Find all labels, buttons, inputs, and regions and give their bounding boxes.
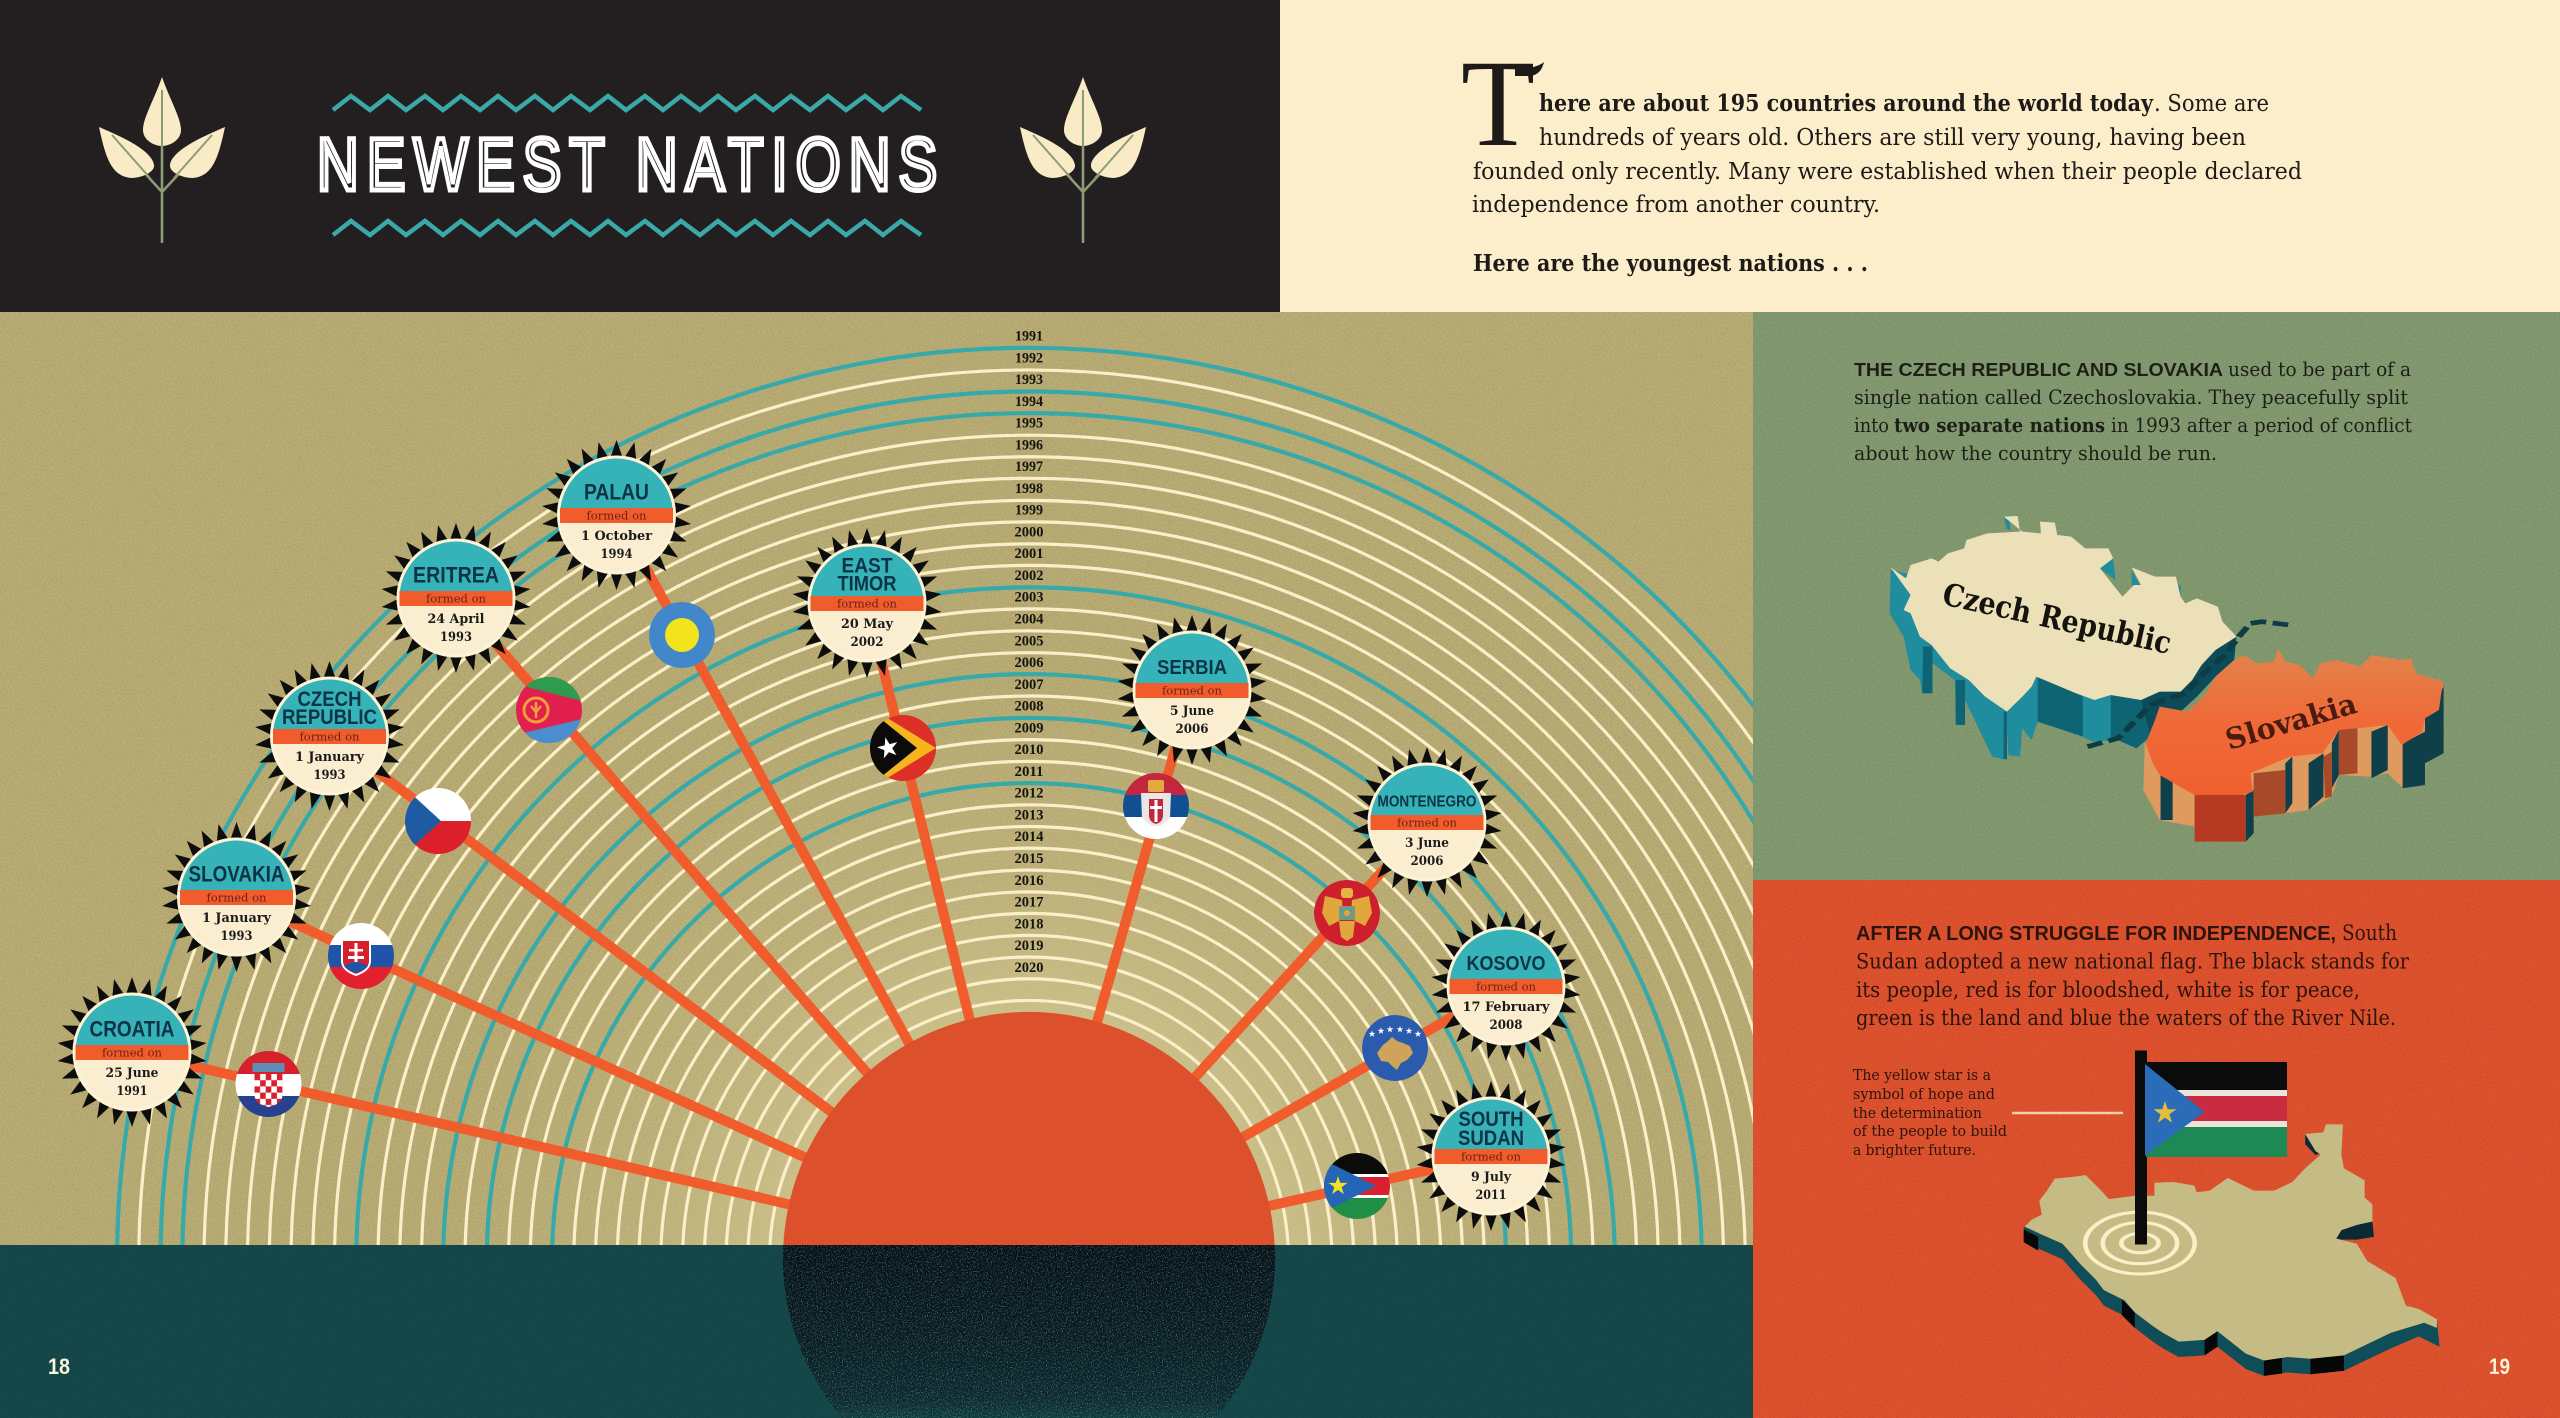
year labels: 2008 bbox=[1014, 699, 1044, 715]
year labels: 1992 bbox=[1015, 350, 1043, 366]
Slovakia extruded side bbox=[2143, 687, 2444, 842]
year labels: 1998 bbox=[1015, 481, 1043, 497]
badge: South Sudan: 9 July bbox=[1471, 1170, 1511, 1185]
badge: Serbia: 5 June bbox=[1170, 704, 1214, 719]
year labels: 2007 bbox=[1014, 677, 1044, 693]
badge: East Timor: 2002 bbox=[850, 635, 884, 650]
flag: Palau bbox=[649, 602, 715, 668]
badge: Palau: 1994 bbox=[600, 547, 632, 562]
drop cap T: T bbox=[1461, 35, 1535, 172]
badge: Czech Republic: 1 January bbox=[295, 750, 364, 765]
badge: Czech Republic: CZECH bbox=[298, 688, 362, 711]
badge: Montenegro: 3 June bbox=[1405, 836, 1449, 851]
badge: Slovakia: formed on bbox=[206, 890, 267, 904]
year labels: 2019 bbox=[1014, 938, 1044, 954]
panel text: in 1993 after a period of conflict bbox=[2111, 413, 2412, 437]
callout text: yellow star: a brighter future. bbox=[1853, 1143, 1976, 1159]
panel: South Sudan bbox=[1853, 921, 2440, 1376]
badge: Eritrea bbox=[381, 523, 531, 673]
label: Czech Republic: Czech Republic bbox=[1939, 577, 2175, 662]
badge: South Sudan: formed on bbox=[1461, 1150, 1522, 1164]
badge: South Sudan: SUDAN bbox=[1458, 1127, 1524, 1150]
badge: Serbia bbox=[1117, 615, 1267, 765]
map: Czech Republic and Slovakia bbox=[1890, 516, 2444, 842]
badge: Palau: 1 October bbox=[581, 529, 652, 544]
intro paragraph: here are about 195 countries around the world today bbox=[1539, 90, 2154, 117]
badge: Kosovo: KOSOVO bbox=[1466, 953, 1546, 975]
panel text: into bbox=[1854, 413, 1889, 437]
panel text bbox=[1856, 921, 2410, 1030]
panel text: about how the country should be run. bbox=[1854, 441, 2217, 465]
panel text bbox=[1854, 357, 2412, 465]
intro paragraph: . Some are bbox=[2154, 91, 2269, 117]
Slovakia top surface bbox=[2146, 648, 2444, 795]
badge: East Timor bbox=[792, 528, 942, 678]
year labels: 1994 bbox=[1015, 394, 1043, 410]
intro paragraph: hundreds of years old. Others are still very young, having been bbox=[1539, 125, 2246, 151]
badge: Slovakia: 1993 bbox=[220, 929, 252, 944]
target rings bbox=[2085, 1212, 2195, 1274]
panel text: THE CZECH REPUBLIC AND SLOVAKIA bbox=[1854, 359, 2223, 380]
badge: Slovakia: SLOVAKIA bbox=[188, 862, 285, 886]
year labels: 2011 bbox=[1014, 764, 1044, 780]
chart: radial timeline bbox=[58, 331, 1753, 1418]
light glow around the sun bbox=[0, 312, 1753, 1245]
top zigzag rule bbox=[333, 96, 921, 110]
badge: South Sudan bbox=[1416, 1081, 1566, 1231]
intro paragraph bbox=[1472, 90, 2302, 218]
badge: South Sudan: 2011 bbox=[1476, 1188, 1506, 1203]
badge: Montenegro: 2006 bbox=[1410, 854, 1444, 869]
flag: Czech Republic bbox=[405, 788, 471, 854]
year labels: 2003 bbox=[1014, 590, 1044, 606]
flag: Slovakia bbox=[328, 923, 394, 989]
badge: Slovakia: 1 January bbox=[202, 911, 271, 926]
page number 18: 18 bbox=[48, 1354, 70, 1379]
year labels: 2013 bbox=[1014, 807, 1044, 823]
bottom zigzag rule bbox=[333, 221, 921, 235]
flag: East Timor bbox=[870, 714, 936, 782]
label: Slovakia: Slovakia bbox=[2221, 686, 2361, 757]
badge: East Timor: formed on bbox=[837, 596, 898, 610]
lead-in line: Here are the youngest nations . . . bbox=[1473, 250, 1868, 277]
year labels: 2001 bbox=[1014, 546, 1044, 562]
title: NEWEST NATIONS bbox=[317, 124, 937, 207]
sun below the horizon bbox=[783, 1245, 1275, 1418]
year labels: 2020 bbox=[1014, 960, 1044, 976]
flag: Serbia bbox=[1123, 773, 1189, 839]
icon: right leaf sprig bbox=[1020, 77, 1146, 243]
year labels: 2000 bbox=[1014, 524, 1044, 540]
badge: Palau: PALAU bbox=[584, 480, 649, 504]
badge: Czech Republic: 1993 bbox=[314, 768, 346, 783]
icon: left leaf sprig bbox=[99, 77, 225, 243]
badge: East Timor: EAST bbox=[842, 554, 893, 578]
panel: intro text bbox=[1280, 0, 2560, 312]
year labels: 2014 bbox=[1014, 829, 1044, 845]
badge: South Sudan: SOUTH bbox=[1458, 1108, 1524, 1131]
year labels bbox=[1014, 328, 1044, 976]
callout text: yellow star bbox=[1853, 1068, 2007, 1159]
flag: Montenegro bbox=[1314, 880, 1380, 946]
badge: Serbia: 2006 bbox=[1176, 722, 1208, 737]
panel text: green is the land and blue the waters of the River Nile. bbox=[1856, 1006, 2396, 1030]
badge: Montenegro: MONTENEGRO bbox=[1378, 794, 1476, 810]
year labels: 2016 bbox=[1014, 873, 1044, 889]
panel text: South bbox=[2342, 921, 2397, 945]
year labels: 2012 bbox=[1014, 786, 1044, 802]
panel text: AFTER A LONG STRUGGLE FOR INDEPENDENCE, bbox=[1856, 923, 2336, 945]
header panel: title bbox=[0, 0, 1280, 312]
panel text: used to be part of a bbox=[2228, 357, 2411, 381]
year labels: 2002 bbox=[1014, 568, 1044, 584]
South Sudan flag on pole bbox=[2135, 1050, 2287, 1244]
year labels: 1997 bbox=[1015, 459, 1043, 475]
map: South Sudan bbox=[2024, 1124, 2440, 1376]
badge: Palau bbox=[541, 440, 692, 590]
badge: Eritrea: formed on bbox=[426, 592, 487, 606]
badge: East Timor: 20 May bbox=[841, 617, 893, 632]
badge: Czech Republic bbox=[254, 661, 405, 811]
year labels: 2010 bbox=[1014, 742, 1044, 758]
panel: Czech Republic and Slovakia bbox=[1854, 357, 2444, 842]
badge: Croatia: formed on bbox=[102, 1046, 163, 1060]
badge: Montenegro: formed on bbox=[1397, 816, 1458, 830]
badge: Czech Republic: formed on bbox=[300, 730, 360, 744]
intro paragraph: founded only recently. Many were established when their people declared bbox=[1473, 159, 2302, 185]
badge: Eritrea: 1993 bbox=[440, 630, 472, 645]
year labels: 1996 bbox=[1015, 437, 1043, 453]
year labels: 2018 bbox=[1014, 916, 1044, 932]
callout text: yellow star: the determination bbox=[1853, 1106, 1982, 1122]
panel text: single nation called Czechoslovakia. They peacefully split bbox=[1854, 385, 2408, 409]
badge: Croatia: 25 June bbox=[106, 1066, 158, 1081]
callout text: yellow star: The yellow star is a bbox=[1853, 1068, 1991, 1084]
badge: Montenegro bbox=[1352, 747, 1502, 897]
year labels: 2009 bbox=[1014, 720, 1044, 736]
badge: Eritrea: 24 April bbox=[428, 612, 485, 627]
badge: Eritrea: ERITREA bbox=[413, 562, 499, 588]
badge: Croatia: 1991 bbox=[116, 1084, 148, 1099]
badge: Kosovo bbox=[1431, 911, 1581, 1061]
flag: South Sudan bbox=[1324, 1153, 1390, 1219]
badge: Kosovo: formed on bbox=[1476, 980, 1537, 994]
flag: Croatia bbox=[236, 1051, 302, 1117]
year labels: 1999 bbox=[1015, 503, 1043, 519]
badge: Serbia: SERBIA bbox=[1157, 657, 1227, 679]
badge: Croatia bbox=[57, 977, 207, 1127]
year labels: 2017 bbox=[1014, 894, 1044, 910]
callout text: yellow star: symbol of hope and bbox=[1853, 1087, 1995, 1103]
badge: Czech Republic: REPUBLIC bbox=[282, 706, 377, 729]
badge: Kosovo: 2008 bbox=[1490, 1018, 1522, 1033]
concentric year rings bbox=[117, 348, 1941, 1245]
panel text: its people, red is for bloodshed, white is for peace, bbox=[1856, 978, 2360, 1002]
badge: Slovakia bbox=[161, 822, 312, 972]
year labels: 2004 bbox=[1014, 612, 1044, 628]
badge: Croatia: CROATIA bbox=[90, 1016, 175, 1042]
year labels: 2005 bbox=[1014, 633, 1044, 649]
Czech Republic top surface bbox=[1891, 516, 2236, 712]
callout text: yellow star: of the people to build bbox=[1853, 1124, 2007, 1140]
badge: Kosovo: 17 February bbox=[1462, 1000, 1550, 1015]
map extrusion bbox=[2024, 1134, 2440, 1376]
flag: Eritrea bbox=[516, 677, 582, 743]
panel text: two separate nations bbox=[1894, 413, 2105, 437]
year labels: 2006 bbox=[1014, 655, 1044, 671]
map top surface bbox=[2025, 1124, 2437, 1360]
badge: East Timor: TIMOR bbox=[838, 572, 896, 596]
orange connector lines bbox=[132, 515, 1506, 1260]
panel text: Sudan adopted a new national flag. The black stands for bbox=[1856, 950, 2410, 974]
year labels: 1993 bbox=[1015, 372, 1043, 388]
callout line bbox=[2012, 1112, 2123, 1114]
badge: Serbia: formed on bbox=[1162, 684, 1223, 698]
flag: Kosovo bbox=[1362, 1015, 1428, 1081]
Czech Republic extruded side bbox=[1890, 516, 2236, 759]
dashed border bbox=[2087, 622, 2289, 747]
badge: Palau: formed on bbox=[586, 508, 647, 522]
intro paragraph: independence from another country. bbox=[1472, 192, 1880, 218]
background panels bbox=[0, 312, 2560, 1418]
year labels: 1995 bbox=[1015, 416, 1043, 432]
sun above the horizon bbox=[783, 1012, 1275, 1245]
year labels: 2015 bbox=[1014, 851, 1044, 867]
year labels: 1991 bbox=[1015, 328, 1043, 344]
page number 19: 19 bbox=[2489, 1354, 2510, 1379]
